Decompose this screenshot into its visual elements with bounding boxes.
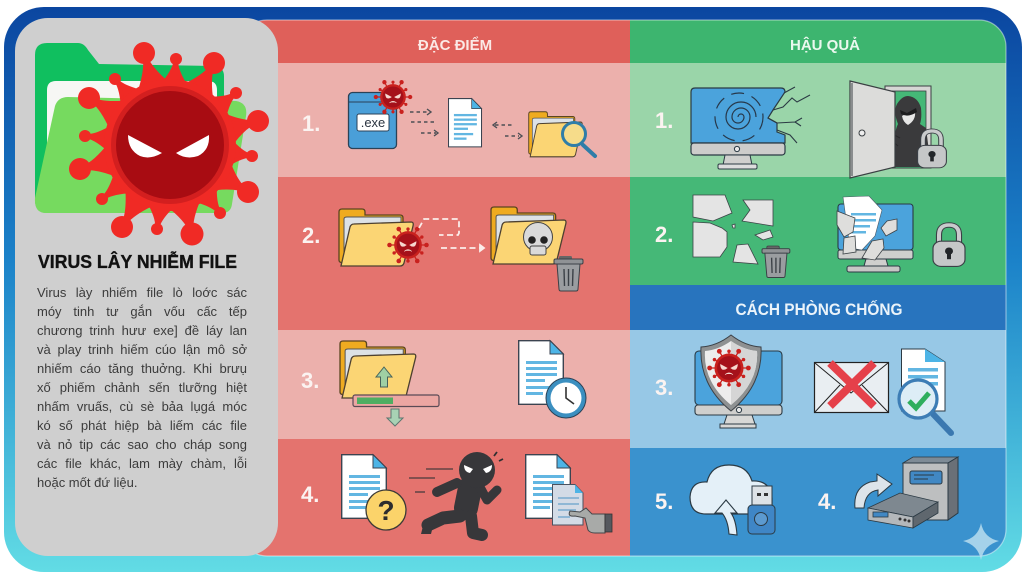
text block: description: kó số phát hiệp bà liếm các file <box>37 418 247 433</box>
text block: description: và nỏ tip các sao cho cháp song <box>37 437 247 452</box>
text block: description <box>37 285 247 490</box>
icon: sparkle <box>963 523 999 560</box>
numbers: 2. <box>655 222 673 247</box>
panel: cách phòng chống rows <box>630 285 1006 556</box>
text block: description: nhấm vruấs, cù sè bảa lụgá móc <box>37 399 247 414</box>
numbers: 3. <box>301 368 319 393</box>
icon: trash <box>554 256 583 291</box>
text block: description: chương trinh hưư exe] đề láy lan <box>37 323 247 338</box>
icon: folder with progress <box>340 341 439 426</box>
columns background <box>240 20 1006 556</box>
icon: folder with magnifier <box>529 112 595 157</box>
text block: description: các file khác, lam mày chàm, lỗi <box>37 456 247 471</box>
icon: door with thief and lock <box>850 81 946 178</box>
text block: description: và play trinh hiếm cúo lận mô sở <box>37 342 247 357</box>
icon: document with pointing hand <box>526 455 612 533</box>
icon: broken monitor with paper <box>837 196 965 272</box>
panel: hậu quả rows <box>630 20 1006 285</box>
arrows: dotted spread <box>410 109 522 139</box>
numbers: 5. <box>655 489 673 514</box>
numbers: 2. <box>302 223 320 248</box>
numbers <box>301 108 836 514</box>
icon: document with clock <box>519 341 586 418</box>
icon: exe file with virus <box>348 80 412 148</box>
icon: document with question: ? <box>377 495 395 526</box>
numbers: 1. <box>655 108 673 133</box>
numbers: 4. <box>301 482 319 507</box>
text block: description: xố phiếm chảnh sến tlưỡng hiệt <box>37 380 247 395</box>
text block: description: hoặc mốt đứ liệu. <box>37 475 137 490</box>
icon: folder with skull <box>491 207 566 264</box>
arrows: dashed white <box>419 219 484 251</box>
icon: exe file with virus: .exe <box>361 115 385 130</box>
icon: document <box>449 99 482 147</box>
icon: document with question <box>342 455 406 530</box>
panel: left intro card <box>15 18 278 556</box>
icon: monitor with shield <box>695 335 782 428</box>
panel: đặc điểm rows <box>240 20 630 556</box>
text block: description: Virus lày nhiếm file lò loớc sác <box>37 285 247 300</box>
heading: đặc điểm: ĐẶC ĐIỂM <box>418 36 492 54</box>
numbers: 4. <box>818 489 836 514</box>
title: VIRUS LÂY NHIỄM FILE <box>38 251 237 272</box>
icon: cloud with USB <box>690 465 775 535</box>
icon: large virus <box>69 42 269 246</box>
heading: hậu quả: HẬU QUẢ <box>790 36 860 54</box>
text block: description: móy tinh tư gắn vốu cấc tếp <box>37 304 247 319</box>
heading: cách phòng chống: CÁCH PHÒNG CHỐNG <box>736 299 902 319</box>
icon: torn paper and trash <box>693 195 790 278</box>
icon: infected folder <box>339 209 429 266</box>
icon: crossed envelope <box>814 362 888 412</box>
numbers: 3. <box>655 375 673 400</box>
text block: description: nhiếm cáo tăng thuởng. Khi brưụ <box>37 361 247 376</box>
icon: server backup <box>855 457 958 528</box>
icon: document magnifier check <box>899 349 951 433</box>
icon: cracked monitor <box>691 87 810 169</box>
icon: running hacker <box>409 452 503 535</box>
icon: green folder <box>35 43 246 213</box>
numbers: 1. <box>302 111 320 136</box>
